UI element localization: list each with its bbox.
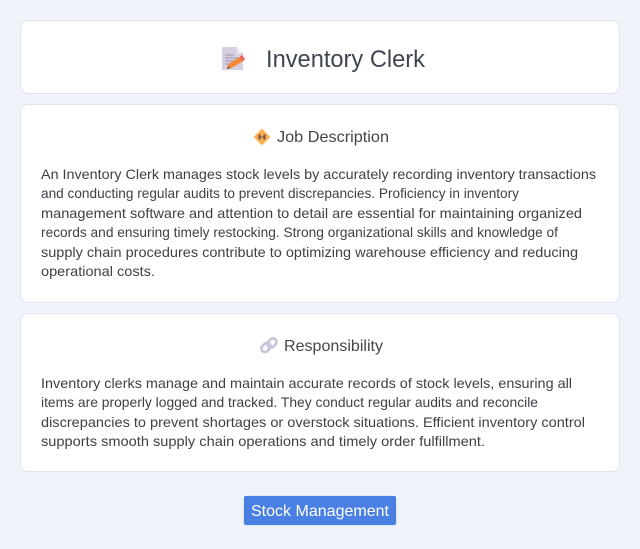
job description text: records and ensuring timely restocking. Strong organizational skills and knowledge of: [41, 224, 558, 240]
job description text: An Inventory Clerk manages stock levels by accurately recording inventory transactions: [41, 166, 596, 182]
responsibility text: [41, 375, 585, 449]
icon: document with pencil: [222, 47, 245, 70]
tag: stock management: Stock Management: [251, 503, 390, 520]
tag: stock management: [244, 496, 396, 526]
job description text: operational costs.: [41, 263, 155, 279]
title text: Inventory Clerk: [266, 46, 426, 73]
panel: responsibility: [20, 314, 620, 472]
heading: responsibility: Responsibility: [284, 338, 383, 355]
panel: job description: [20, 104, 620, 302]
panel: title: [20, 20, 620, 94]
job description text: supply chain procedures contribute to optimizing warehouse efficiency and reducing: [41, 244, 578, 260]
responsibility text: Inventory clerks manage and maintain accurate records of stock levels, ensuring all: [41, 375, 572, 391]
icon: chain link: [260, 337, 278, 354]
job description text: and conducting regular audits to prevent discrepancies. Proficiency in inventory: [41, 185, 519, 201]
responsibility text: supports smooth supply chain operations and timely order fulfillment.: [41, 433, 485, 449]
responsibility text: discrepancies to prevent shortages or overstock situations. Efficient inventory control: [41, 414, 585, 430]
heading: job description: Job Description: [277, 129, 389, 146]
icon: road sign diamond: [254, 129, 270, 145]
job description text: [41, 166, 596, 279]
job description text: management software and attention to detail are essential for maintaining organized: [41, 205, 582, 221]
responsibility text: items are properly logged and tracked. They conduct regular audits and reconcile: [41, 394, 538, 410]
